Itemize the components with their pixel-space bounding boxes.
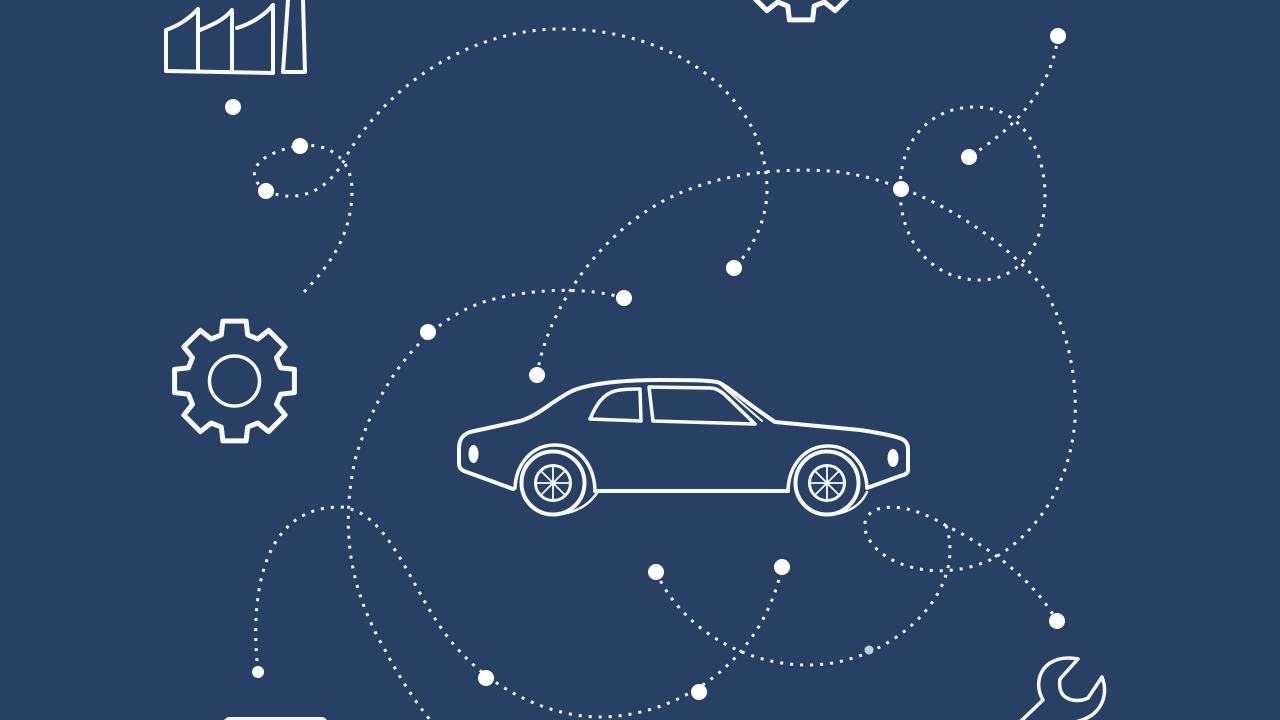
dotted route: lower left arc [256,507,782,717]
icon: car [459,380,908,514]
dotted route: middle left arc [348,290,624,720]
icon: wrench [1020,658,1105,720]
windscreen lines [722,386,773,422]
dotted route: large circle around car [537,170,1075,621]
dotted route: small left loop [254,145,352,293]
icon: bottom object [224,717,327,720]
dotted route: top right connector [969,36,1058,157]
icon: gear top [741,0,861,20]
rear wheel [522,452,597,514]
front wheel arch [788,446,867,490]
icon: factory [166,0,305,73]
rear light [468,445,478,463]
nodes [225,28,1066,700]
car body [459,380,908,489]
dotted route: top large arc [266,29,767,268]
front wheel [796,452,867,514]
dotted route: top right circle [900,107,1045,280]
front light [888,449,898,467]
dotted route: lower right arc [656,525,950,665]
rear wheel arch [515,445,595,490]
icon: gear left [175,321,294,441]
car sill [595,489,788,493]
rear side window [590,389,641,421]
front side window [649,387,755,424]
